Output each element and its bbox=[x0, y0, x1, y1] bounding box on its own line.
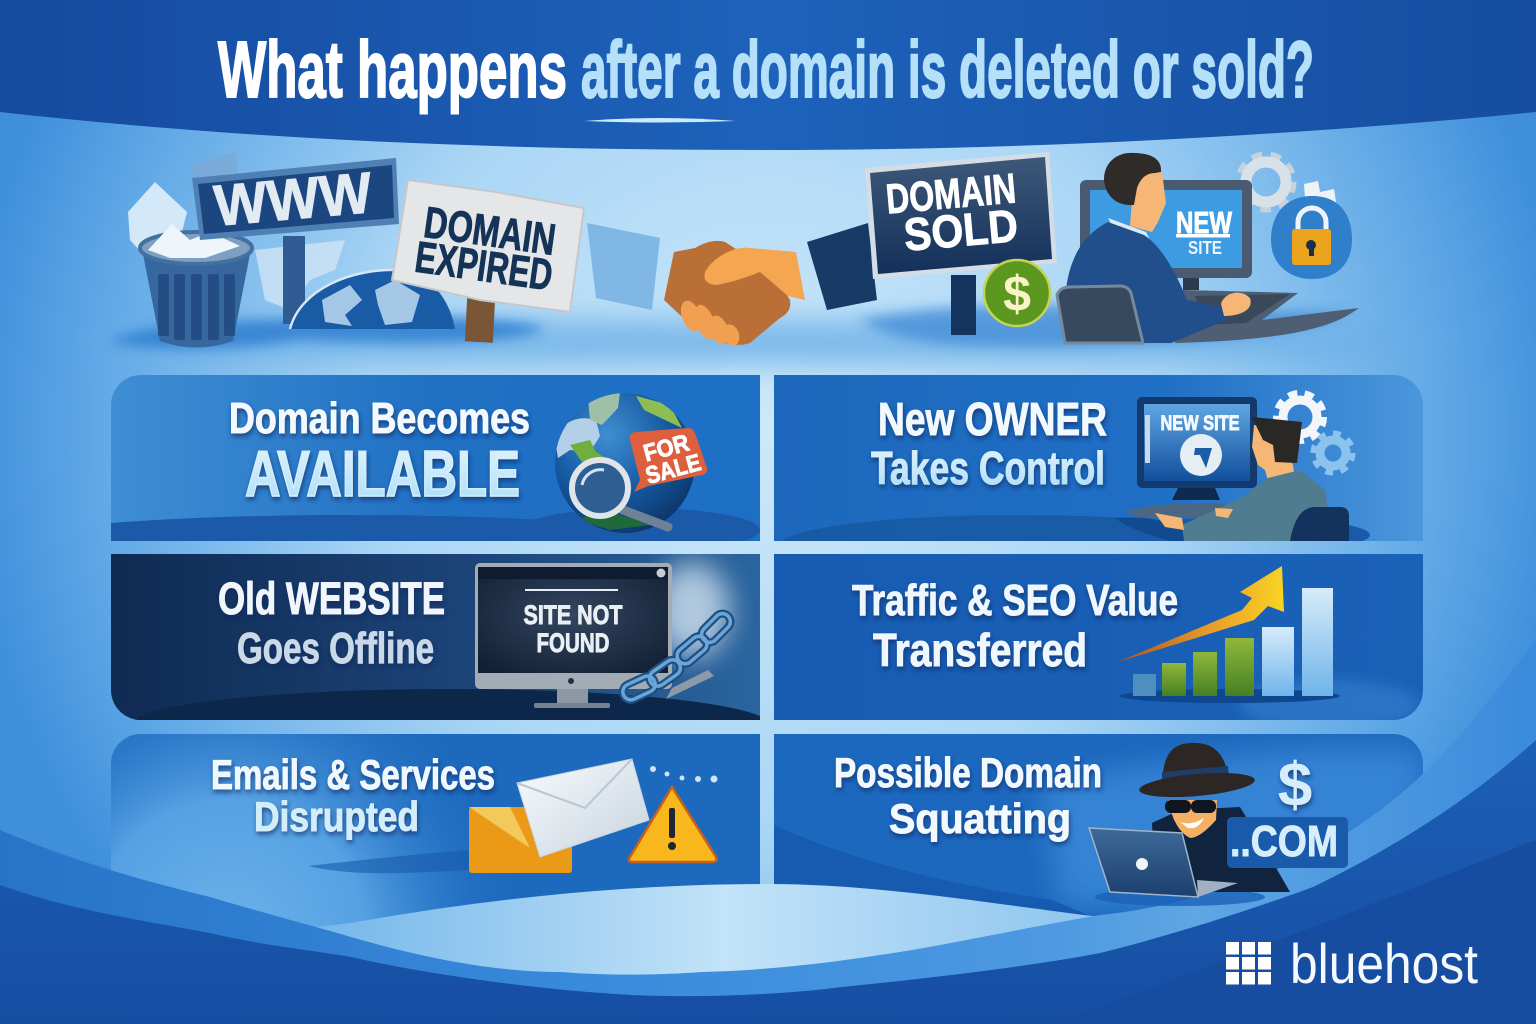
icon: trash can bbox=[140, 224, 252, 348]
faded sleeve bbox=[587, 223, 660, 310]
heading bbox=[871, 393, 1107, 494]
heading bbox=[218, 573, 445, 673]
dollar symbol: $ bbox=[1278, 751, 1312, 820]
WWW sign: WWW bbox=[211, 160, 375, 239]
panel: old website goes offline bbox=[111, 554, 760, 720]
panel: emails and services disrupted bbox=[111, 734, 760, 930]
icon: globe with magnifier and tag: SALE bbox=[643, 449, 704, 490]
desk and laptop bbox=[1175, 290, 1359, 343]
icon: globe with magnifier and tag bbox=[555, 392, 707, 533]
icon: padlock bbox=[1271, 196, 1352, 279]
panel: traffic and SEO value transferred bbox=[774, 554, 1423, 731]
bottom waves bbox=[0, 640, 1536, 1024]
hero illustration: domain sold bbox=[860, 152, 1350, 346]
logo grid bbox=[1226, 942, 1271, 984]
heading: Takes Control bbox=[871, 442, 1105, 494]
heading: Squatting bbox=[889, 795, 1071, 842]
icon: gear bbox=[1240, 156, 1337, 212]
heading: Emails & Services bbox=[211, 751, 495, 798]
icon: envelopes and warning triangle bbox=[469, 759, 718, 873]
logo: bluehost: bluehost bbox=[1290, 932, 1478, 995]
brown hand bbox=[664, 241, 790, 345]
hero illustration: new owner at computer bbox=[1057, 153, 1359, 343]
fade and shading bbox=[111, 734, 466, 927]
logo: bluehost bbox=[1226, 932, 1478, 995]
hero illustration: domain expired bbox=[108, 152, 584, 349]
scattered paper bbox=[128, 182, 187, 262]
sign post bbox=[951, 275, 976, 335]
panel: new owner takes control bbox=[774, 375, 1423, 541]
monitor bbox=[1080, 180, 1252, 290]
monitor: NEW bbox=[1176, 205, 1233, 240]
heading bbox=[834, 749, 1102, 842]
fingers bbox=[677, 298, 742, 348]
icon: squatter with laptop: ..COM bbox=[1230, 817, 1338, 866]
panel: domain becomes available bbox=[111, 375, 760, 541]
WWW sign bbox=[192, 158, 399, 324]
ground shadow bbox=[108, 316, 545, 349]
icon: dollar coin bbox=[984, 260, 1050, 326]
man bbox=[1057, 153, 1251, 343]
icon: monitor, site not found: FOUND bbox=[536, 628, 610, 658]
heading bbox=[211, 751, 495, 840]
heading: Transferred bbox=[873, 624, 1087, 676]
hero illustration: handshake bbox=[587, 223, 877, 348]
bar chart with rising arrow bbox=[1115, 566, 1333, 696]
DOMAIN SOLD sign bbox=[865, 152, 1057, 279]
icon: globe with magnifier and tag: FOR bbox=[641, 429, 692, 467]
icon: squatter with laptop bbox=[1089, 743, 1348, 906]
title: What happens bbox=[218, 25, 567, 114]
panel: possible domain squatting bbox=[774, 734, 1423, 930]
heading: Disrupted bbox=[254, 793, 419, 840]
.com tag bbox=[1227, 817, 1348, 868]
dark sleeve bbox=[807, 223, 877, 310]
icon: monitor, site not found bbox=[475, 563, 734, 708]
heading: Traffic & SEO Value bbox=[852, 576, 1178, 625]
icon: dollar coin: $ bbox=[1003, 266, 1031, 322]
heading bbox=[852, 576, 1178, 676]
heading: AVAILABLE bbox=[245, 437, 520, 510]
title bbox=[218, 25, 1314, 122]
half globe bbox=[290, 270, 455, 329]
title underline bbox=[584, 118, 736, 122]
heading: Domain Becomes bbox=[229, 394, 530, 443]
heading bbox=[229, 394, 530, 510]
icon: broken chain bbox=[620, 610, 734, 702]
heading: Old WEBSITE bbox=[218, 573, 445, 624]
heading: New OWNER bbox=[878, 393, 1107, 445]
heading: Possible Domain bbox=[834, 749, 1102, 796]
orange hand bbox=[704, 248, 805, 300]
heading: Goes Offline bbox=[237, 624, 434, 673]
DOMAIN SOLD sign: SOLD bbox=[902, 199, 1020, 261]
icon: monitor, site not found: SITE NOT bbox=[524, 600, 623, 630]
DOMAIN EXPIRED sign: EXPIRED bbox=[412, 233, 556, 300]
icon: person at computer with gears bbox=[1115, 394, 1352, 541]
DOMAIN SOLD sign: DOMAIN bbox=[884, 164, 1018, 223]
DOMAIN EXPIRED sign bbox=[392, 180, 584, 343]
icon: person at computer with gears: NEW SITE bbox=[1160, 412, 1240, 435]
DOMAIN EXPIRED sign: DOMAIN bbox=[421, 198, 559, 265]
monitor: SITE bbox=[1188, 238, 1222, 258]
